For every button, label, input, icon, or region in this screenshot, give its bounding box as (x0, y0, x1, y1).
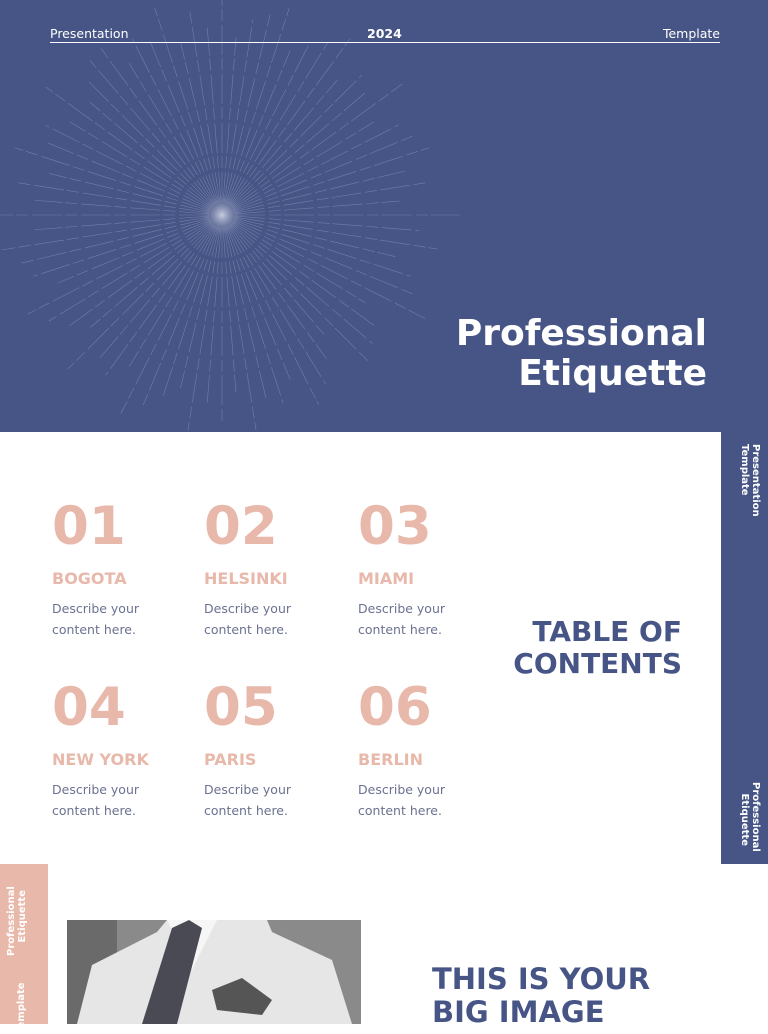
sidebar right: Presentation (750, 444, 761, 517)
contents grid: 02 (204, 496, 278, 557)
sidebar right (721, 432, 768, 864)
header bar: 2024 (367, 26, 402, 41)
title: Etiquette (518, 353, 707, 394)
contents grid: Describe your (358, 782, 445, 797)
toc heading (513, 615, 682, 680)
contents grid: content here. (52, 622, 136, 637)
contents grid: BOGOTA (52, 569, 127, 588)
header bar (50, 26, 720, 43)
toc heading: CONTENTS (513, 647, 682, 680)
sidebar left pink: Etiquette (17, 890, 28, 942)
contents grid: Describe your (52, 601, 139, 616)
contents grid: Describe your (204, 601, 291, 616)
title: Professional (456, 313, 707, 354)
contents grid (52, 496, 445, 818)
sidebar right: Etiquette (739, 794, 750, 846)
sidebar left pink: Professional (6, 886, 17, 956)
contents grid: 06 (358, 677, 432, 738)
contents grid: MIAMI (358, 569, 414, 588)
sidebar left pink (0, 864, 48, 1024)
contents grid: Describe your (52, 782, 139, 797)
toc heading: TABLE OF (532, 615, 682, 648)
contents grid: Describe your (358, 601, 445, 616)
contents grid: 01 (52, 496, 126, 557)
big image heading: THIS IS YOUR (432, 962, 650, 996)
contents grid: PARIS (204, 750, 256, 769)
contents grid: HELSINKI (204, 569, 288, 588)
header bar: Presentation (50, 26, 129, 41)
photo (67, 920, 361, 1024)
contents grid: content here. (358, 803, 442, 818)
big image heading (432, 962, 650, 1029)
sidebar right: Template (739, 444, 750, 496)
starburst (0, 0, 460, 430)
contents grid: 05 (204, 677, 278, 738)
big image heading: BIG IMAGE (432, 995, 604, 1029)
hero panel (0, 0, 768, 432)
contents grid: BERLIN (358, 750, 423, 769)
contents grid: content here. (204, 622, 288, 637)
sidebar right: Professional (750, 782, 761, 852)
contents grid: content here. (204, 803, 288, 818)
title (456, 313, 707, 394)
contents grid: 04 (52, 677, 126, 738)
header bar: Template (663, 26, 720, 41)
sidebar left pink: Template (16, 982, 27, 1034)
contents grid: NEW YORK (52, 750, 149, 769)
contents grid: Describe your (204, 782, 291, 797)
contents grid: content here. (358, 622, 442, 637)
contents grid: 03 (358, 496, 432, 557)
contents grid: content here. (52, 803, 136, 818)
